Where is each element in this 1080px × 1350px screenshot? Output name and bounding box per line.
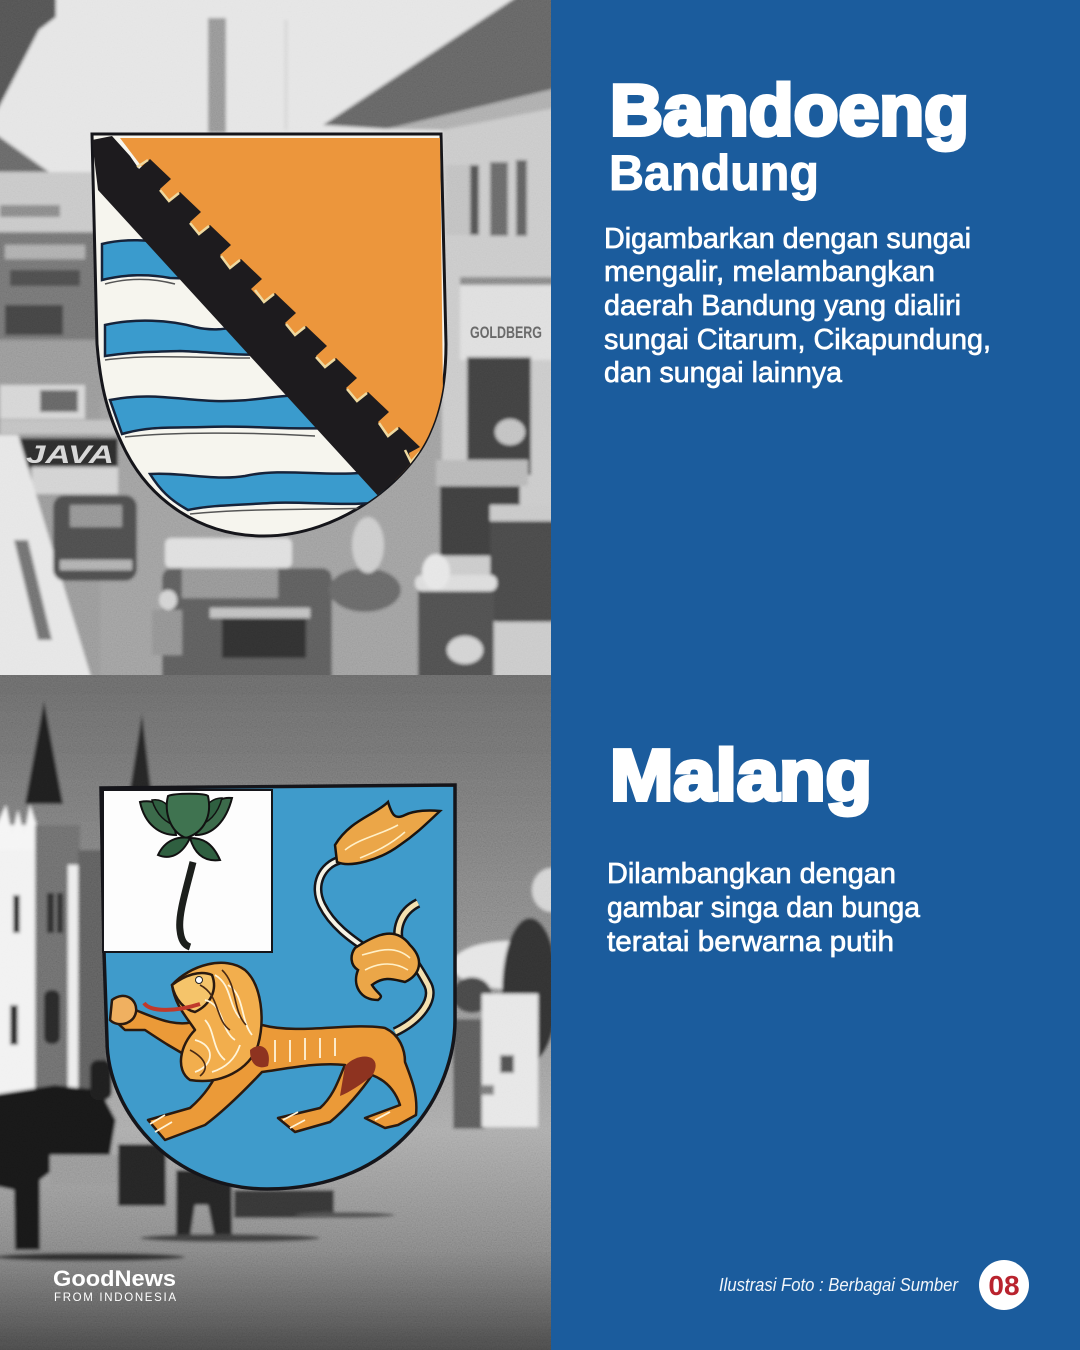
lion tongue [144,1003,200,1010]
text block: Bandung description: dan sungai lainnya [604,357,842,389]
text block: Malang description [607,858,920,958]
text block: Bandung description: Digambarkan dengan sungai [604,223,971,255]
page number badge: 08 [988,1270,1020,1301]
shield quarter: white square [103,790,272,952]
heading: Bandoeng: Bandoeng [610,71,969,151]
text block: Bandung description: daerah Bandung yang dialiri [604,290,961,322]
icon: flower-tipped lion tail [318,802,440,1032]
text block: Malang description: Dilambangkan dengan [607,858,896,890]
icon: Malang coat of arms shield [101,785,455,1189]
shield stripes: blue water waves [102,240,400,510]
sign: Java store sign: JAVA [26,441,114,469]
text block: Bandung description [604,223,991,389]
logo: GoodNews From Indonesia: FROM INDONESIA [54,1292,176,1304]
shield band: black crenellated diagonal [92,136,420,498]
panel: blue text background [551,0,1080,1350]
text block: Bandung description: sungai Citarum, Cikapundung, [604,324,991,356]
logo: GoodNews From Indonesia [53,1266,176,1304]
text block: Malang description: teratai berwarna putih [607,926,894,958]
heading: Malang: Malang [610,736,872,816]
photo: Malang square with church [0,655,580,1350]
lion markings [150,975,390,1132]
text block: Malang description: gambar singa dan bunga [607,892,920,924]
icon: Bandung coat of arms shield [92,134,446,536]
icon: lotus with stem [140,794,232,947]
shield field: orange [120,138,444,480]
sign: Goldberg store sign: GOLDBERG [470,323,542,342]
subheading: Bandung: Bandung [609,145,819,201]
logo: GoodNews From Indonesia: GoodNews [53,1266,176,1291]
credit: photo source: Ilustrasi Foto : Berbagai Sumber [719,1275,959,1295]
text block: Bandung description: mengalir, melambangkan [604,256,935,288]
icon: golden lion [110,963,416,1140]
photo: Bandung street scene [0,0,580,700]
page number badge [979,1260,1029,1310]
